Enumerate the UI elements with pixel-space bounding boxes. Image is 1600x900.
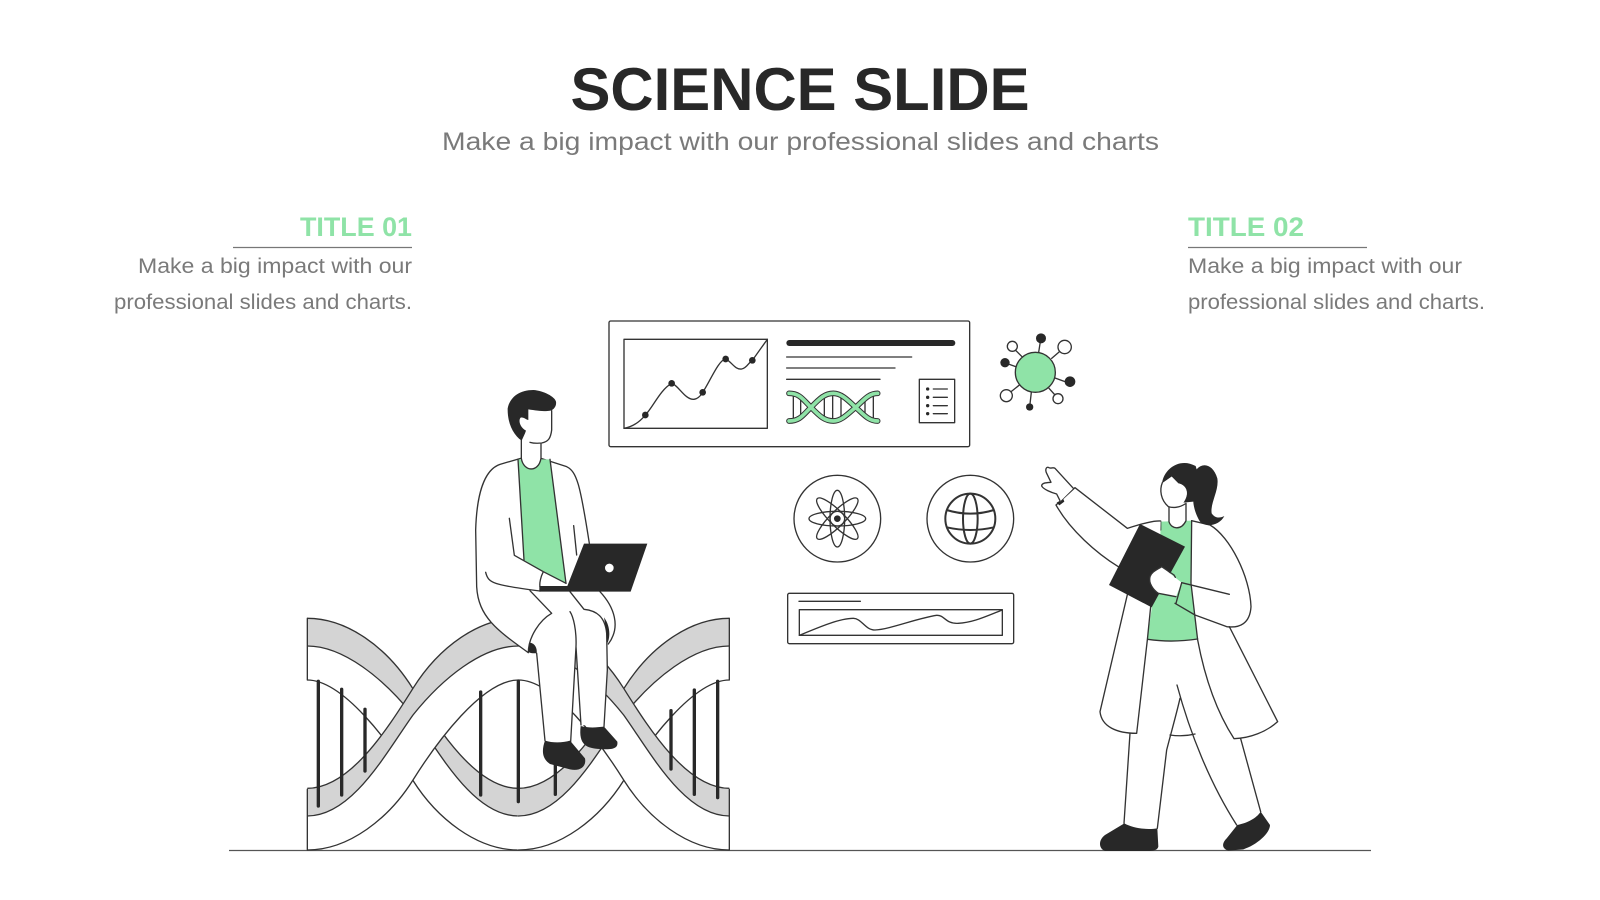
woman: lab coat xyxy=(1100,521,1278,739)
description: title 01: Make a big impact with our xyxy=(138,255,412,278)
man: face xyxy=(523,409,552,443)
heading: title 01: TITLE 01 xyxy=(300,212,412,242)
woman: shoes xyxy=(1100,812,1270,851)
man: laptop xyxy=(539,544,647,592)
ground line xyxy=(229,850,1375,852)
text block: title 01 xyxy=(114,212,412,314)
description: title 02: professional slides and charts. xyxy=(1188,291,1485,314)
woman: hair and ponytail xyxy=(1162,463,1224,525)
woman: tablet xyxy=(1109,524,1185,607)
woman: neck xyxy=(1169,502,1186,528)
icon: virus xyxy=(1000,333,1075,411)
man: green shirt xyxy=(518,459,566,583)
woman: hand and cuff xyxy=(1150,567,1182,603)
icon: atom xyxy=(794,475,881,562)
text lines xyxy=(787,343,952,379)
man: arm details xyxy=(486,518,577,591)
man: shoes xyxy=(543,726,617,770)
man: lab coat xyxy=(476,458,615,653)
icon: globe xyxy=(927,475,1014,562)
line chart xyxy=(624,339,767,428)
subtitle: Make a big impact with our professional slides and charts xyxy=(442,128,1159,156)
panel: dashboard board xyxy=(609,321,970,447)
woman: shirt xyxy=(1148,521,1198,641)
description: title 01: professional slides and charts. xyxy=(114,291,412,314)
description: title 02: Make a big impact with our xyxy=(1188,255,1462,278)
woman: pointing hand xyxy=(1042,467,1073,502)
illustration: woman with tablet xyxy=(1042,463,1278,851)
title: SCIENCE SLIDE xyxy=(570,56,1030,123)
man: hair xyxy=(508,390,556,441)
icon: document list xyxy=(919,379,955,423)
heading: title 02: TITLE 02 xyxy=(1188,212,1304,242)
man: legs xyxy=(528,591,607,742)
illustration: man with laptop xyxy=(476,390,647,770)
woman: face xyxy=(1161,477,1187,507)
panel: small chart xyxy=(788,593,1014,644)
icon: small DNA xyxy=(789,393,878,422)
woman: trousers xyxy=(1124,640,1261,828)
woman: raised arm xyxy=(1056,488,1161,567)
man: neck xyxy=(521,433,541,469)
illustration: large DNA helix xyxy=(307,618,730,850)
text block: title 02 xyxy=(1188,212,1485,314)
